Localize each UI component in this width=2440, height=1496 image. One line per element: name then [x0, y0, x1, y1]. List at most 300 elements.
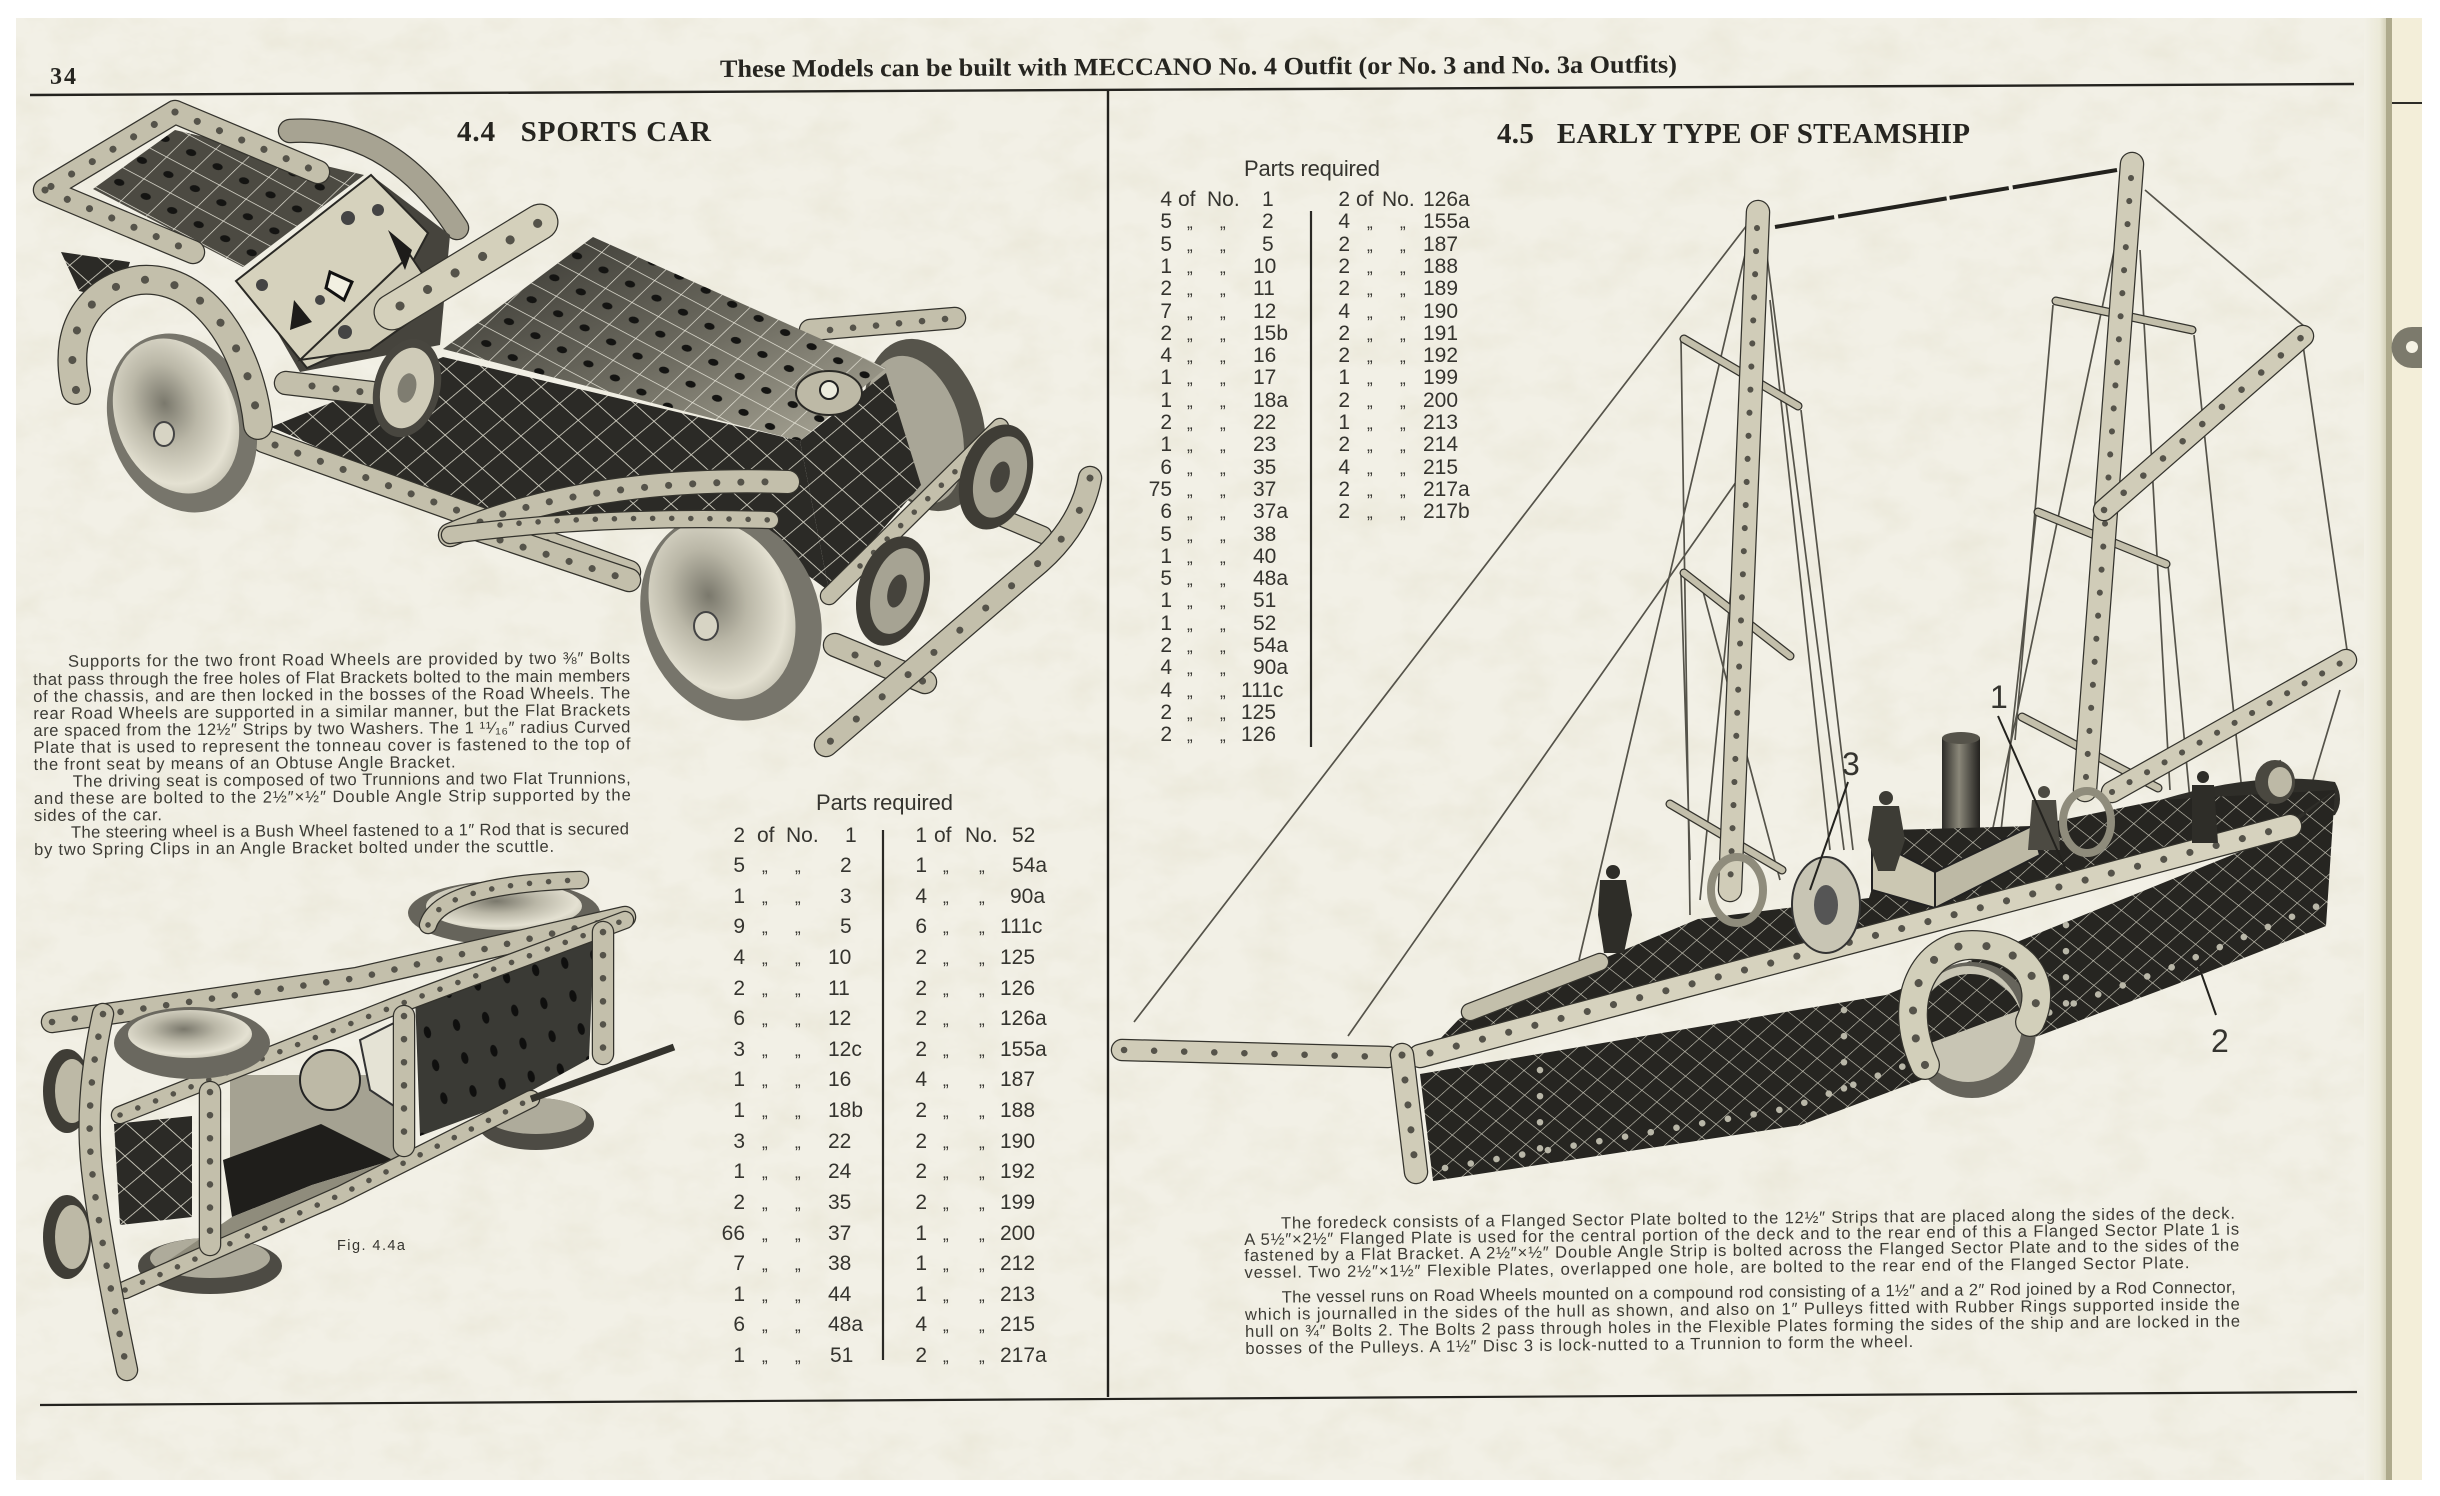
right column: 4	[1338, 300, 1350, 323]
left column: „	[795, 980, 801, 999]
right column: 2	[1338, 277, 1350, 300]
right column: „	[1400, 392, 1406, 411]
right column: „	[1367, 436, 1373, 455]
sports car description: and these are bolted to the 2½″×½″ Double Angle Strip supported by the	[34, 785, 631, 808]
left column: 4	[1160, 656, 1172, 679]
front mudguard	[72, 280, 258, 425]
right column: „	[979, 1133, 985, 1152]
left column: 10	[1253, 255, 1276, 278]
paddle box curved strip	[1913, 945, 2036, 1065]
right column: „	[1367, 280, 1373, 299]
left column: „	[795, 1102, 801, 1121]
right column: „	[1400, 503, 1406, 522]
right column: „	[943, 888, 949, 907]
right column: „	[979, 888, 985, 907]
left column: „	[1220, 503, 1226, 522]
left column: „	[1187, 481, 1193, 500]
right column: 2	[1338, 478, 1350, 501]
right column: „	[1400, 280, 1406, 299]
right column: 4	[915, 1313, 927, 1336]
left column: „	[1220, 615, 1226, 634]
left column: 9	[733, 915, 745, 938]
left column: „	[762, 1041, 768, 1060]
funnel	[1942, 732, 1980, 884]
deck strip	[1420, 826, 2290, 1056]
right column: „	[979, 1194, 985, 1213]
right column: „	[1367, 369, 1373, 388]
sailor aft of funnel	[2028, 786, 2060, 850]
sports car description: that pass through the free holes of Flat Brackets bolted to the main members	[33, 666, 630, 689]
left column: 90a	[1253, 656, 1288, 679]
right column: 190	[1000, 1130, 1035, 1153]
right column: 200	[1000, 1222, 1035, 1245]
left column: „	[795, 857, 801, 876]
side plate	[415, 937, 594, 1136]
left column: „	[795, 1286, 801, 1305]
right column: 2	[915, 946, 927, 969]
near wheel top	[114, 1007, 270, 1079]
left column: 111c	[1241, 679, 1283, 702]
left column: „	[795, 1255, 801, 1274]
floor plate rear	[125, 1160, 393, 1290]
right column: 4	[915, 885, 927, 908]
steamship description: vessel. Two 2½″×1½″ Flexible Plates, overlapped one hole, are bolted to the rear end of the Flanged Sector Plate.	[1244, 1253, 2190, 1282]
left column: 125	[1241, 701, 1276, 724]
right column: 217b	[1423, 500, 1470, 523]
deck	[1420, 790, 2335, 1060]
left column: „	[1220, 682, 1226, 701]
front bumper	[826, 478, 1090, 745]
left column: „	[1220, 481, 1226, 500]
callout number 1: 1	[1990, 679, 2008, 715]
chassis strip	[264, 441, 629, 572]
left column: 35	[1253, 456, 1276, 479]
title: sports car: 4.4 SPORTS CAR	[457, 116, 712, 148]
right column: „	[943, 1255, 949, 1274]
steamship description: which is journalled in the sides of the hull as shown, and also on 1″ Pulleys fitted with Rubber Rings supported inside the	[1244, 1295, 2240, 1324]
right column: 2	[1338, 322, 1350, 345]
top stay between masts	[1775, 170, 2117, 227]
left column: „	[795, 918, 801, 937]
right column: „	[979, 857, 985, 876]
stem strip	[1402, 1055, 1416, 1172]
left column: „	[1220, 414, 1226, 433]
left column: 2	[1160, 411, 1172, 434]
callout number 2: 2	[2211, 1023, 2229, 1059]
left column: „	[1187, 280, 1193, 299]
left column: „	[762, 1225, 768, 1244]
right column: „	[1400, 303, 1406, 322]
right column: 1	[1338, 411, 1350, 434]
left column: „	[1220, 659, 1226, 678]
left column: 54a	[1253, 634, 1288, 657]
left column: 2	[1160, 701, 1172, 724]
right column: „	[1367, 347, 1373, 366]
steering wheel disc	[796, 371, 862, 415]
left column: „	[795, 1225, 801, 1244]
right column: of	[934, 824, 952, 847]
right column: 215	[1000, 1313, 1035, 1336]
left column: 5	[1160, 233, 1172, 256]
left column: 6	[733, 1313, 745, 1336]
road wheel	[1908, 962, 2036, 1098]
right column: 2	[1338, 344, 1350, 367]
right column: „	[1400, 459, 1406, 478]
sports car description: are spaced from the 12½″ Strips by two Washers. The 1 ¹¹⁄₁₆″ radius Curved	[33, 717, 630, 740]
left column: „	[1187, 570, 1193, 589]
lower boom	[2112, 660, 2346, 792]
right column: 126a	[1423, 188, 1470, 211]
left column: 11	[1253, 277, 1275, 300]
left column: „	[1220, 213, 1226, 232]
left column: „	[795, 1010, 801, 1029]
left column: 18a	[1253, 389, 1288, 412]
right column: „	[943, 1225, 949, 1244]
left column: „	[1220, 236, 1226, 255]
left column: „	[795, 949, 801, 968]
main mast	[2085, 164, 2132, 790]
left column: „	[1220, 392, 1226, 411]
left column: „	[762, 1010, 768, 1029]
left column: „	[762, 1286, 768, 1305]
right column: 1	[915, 824, 927, 847]
left column: „	[1187, 414, 1193, 433]
right column: „	[1367, 213, 1373, 232]
callout leader 2	[2198, 964, 2216, 1015]
left column: „	[1220, 436, 1226, 455]
right column: „	[979, 949, 985, 968]
callout number 3: 3	[1842, 746, 1860, 782]
left column: 5	[1262, 233, 1274, 256]
left column: „	[1187, 659, 1193, 678]
left column: 6	[1160, 456, 1172, 479]
far bottom wheel	[478, 1098, 594, 1150]
hull side	[1420, 790, 2335, 1181]
left column: 2	[1160, 277, 1172, 300]
sailor at funnel	[1868, 791, 1905, 871]
left column: „	[795, 1163, 801, 1182]
illustration: steamship	[1122, 164, 2348, 1181]
right column: 212	[1000, 1252, 1035, 1275]
left pulleys	[43, 1049, 91, 1279]
left column: „	[1220, 548, 1226, 567]
right column: „	[979, 1163, 985, 1182]
radiator grille	[800, 373, 921, 591]
left column: 5	[840, 915, 852, 938]
right column: 189	[1423, 277, 1458, 300]
sports car description: The steering wheel is a Bush Wheel fastened to a 1″ Rod that is secured	[71, 819, 629, 842]
far side road wheel	[845, 324, 1005, 526]
callout leader 1	[1998, 716, 2066, 870]
column separator	[882, 830, 884, 1360]
left column: „	[762, 980, 768, 999]
left column: 1	[733, 1068, 745, 1091]
steamship description: The foredeck consists of a Flanged Sector Plate bolted to the 12½″ Strips that are placed along the sides of the deck.	[1281, 1204, 2235, 1233]
right column: 52	[1012, 824, 1035, 847]
right column: of	[1356, 188, 1374, 211]
right column: „	[979, 918, 985, 937]
left column: 22	[1253, 411, 1276, 434]
left column: „	[762, 1347, 768, 1366]
second long strip	[120, 920, 625, 1115]
right column: 191	[1423, 322, 1458, 345]
right column: 2	[915, 1130, 927, 1153]
yard arms, main mast	[2022, 301, 2192, 788]
rear mudguard	[290, 131, 457, 228]
right column: 6	[915, 915, 927, 938]
left column	[722, 824, 863, 1367]
right column: „	[1367, 414, 1373, 433]
right column: „	[943, 1041, 949, 1060]
right column: „	[1367, 236, 1373, 255]
right column: 188	[1000, 1099, 1035, 1122]
left column: 4	[1160, 188, 1172, 211]
right column: „	[1400, 258, 1406, 277]
steering pulley	[363, 332, 451, 444]
left column: 1	[733, 885, 745, 908]
left column: 35	[828, 1191, 851, 1214]
rear road wheel	[81, 311, 283, 535]
right column: „	[979, 1255, 985, 1274]
right column: 2	[1338, 500, 1350, 523]
right column: „	[979, 1010, 985, 1029]
left column: „	[1187, 503, 1193, 522]
left column: 2	[733, 1191, 745, 1214]
illustration: underside of car, Fig. 4.4a	[43, 880, 674, 1370]
left column: 1	[733, 1160, 745, 1183]
right column: „	[943, 1102, 949, 1121]
left column: „	[795, 1347, 801, 1366]
bottom chassis strip and rod	[125, 1047, 674, 1290]
right column: 155a	[1423, 210, 1470, 233]
left column: 1	[1160, 255, 1172, 278]
top long strip	[52, 917, 625, 1022]
right column: 2	[915, 1191, 927, 1214]
near bottom wheel	[138, 1238, 282, 1294]
left column: 1	[1160, 389, 1172, 412]
right column: „	[1400, 213, 1406, 232]
right column: 213	[1423, 411, 1458, 434]
left column: „	[1187, 236, 1193, 255]
right column: 155a	[1000, 1038, 1047, 1061]
left column: „	[1220, 526, 1226, 545]
right column: „	[943, 980, 949, 999]
sports car description: The driving seat is composed of two Trunnions and two Flat Trunnions,	[73, 768, 631, 791]
right column: „	[979, 1102, 985, 1121]
right column: 2	[1338, 233, 1350, 256]
driving seat plates	[236, 175, 440, 368]
page number: 34	[50, 64, 76, 90]
ring aft	[2063, 791, 2111, 853]
right column: 4	[915, 1068, 927, 1091]
front pulleys	[844, 415, 1046, 654]
left column: „	[762, 857, 768, 876]
left column: 6	[733, 1007, 745, 1030]
right column: No.	[965, 824, 998, 847]
right column: 1	[1338, 366, 1350, 389]
right column: „	[943, 918, 949, 937]
right column: 217a	[1423, 478, 1470, 501]
left column: 23	[1253, 433, 1276, 456]
header rule	[30, 84, 2354, 95]
right column: „	[1367, 503, 1373, 522]
left column: „	[1187, 637, 1193, 656]
right column: No.	[1382, 188, 1415, 211]
sailor at stern	[2192, 771, 2218, 843]
steamship description: A 5½″×2½″ Flanged Plate is used for the central portion of the deck and to the rear end of this a Flanged Sector Plate 1 is	[1244, 1220, 2239, 1249]
right column: „	[979, 1225, 985, 1244]
steamship description: hull on ¾″ Bolts 2. The Bolts 2 pass through holes in the Flexible Plates forming the sides of the ship and are locked in the	[1245, 1312, 2240, 1341]
right column: „	[943, 1133, 949, 1152]
left column: „	[1220, 726, 1226, 745]
left column: 12	[1253, 300, 1276, 323]
left column: 48a	[828, 1313, 863, 1336]
lower curved strip	[450, 518, 770, 535]
left column: 4	[1160, 344, 1172, 367]
hull rivets	[1445, 905, 2320, 1168]
left column: 37	[828, 1222, 851, 1245]
yard arms, fore mast	[1670, 339, 1798, 870]
left column: 75	[1149, 478, 1172, 501]
far wheel top	[408, 881, 600, 945]
left column: 5	[1160, 210, 1172, 233]
left column: „	[1220, 369, 1226, 388]
left column: 1	[1160, 545, 1172, 568]
left column: „	[1220, 592, 1226, 611]
right column: 215	[1423, 456, 1458, 479]
left column: 1	[1160, 589, 1172, 612]
right column: „	[943, 1010, 949, 1029]
left column: „	[762, 918, 768, 937]
left column: „	[762, 1071, 768, 1090]
right column: „	[979, 1286, 985, 1305]
right column: 2	[1338, 188, 1350, 211]
left column: 3	[840, 885, 852, 908]
left column: „	[762, 949, 768, 968]
left column: 10	[828, 946, 851, 969]
right column: „	[943, 1286, 949, 1305]
left column: „	[1187, 704, 1193, 723]
left column: „	[1187, 325, 1193, 344]
left column: „	[1220, 303, 1226, 322]
left column: „	[1187, 592, 1193, 611]
parts list heading: Parts required	[1244, 156, 1380, 181]
right column: 200	[1423, 389, 1458, 412]
parts list: sports car	[722, 790, 1047, 1367]
left column: 1	[733, 1099, 745, 1122]
right column	[915, 824, 1047, 1367]
right column: „	[1367, 392, 1373, 411]
right column: 2	[915, 977, 927, 1000]
sports car description: Supports for the two front Road Wheels are provided by two ⅜″ Bolts	[68, 648, 630, 671]
mid gears	[230, 1020, 400, 1165]
left column: „	[762, 1102, 768, 1121]
left column: 37a	[1253, 500, 1288, 523]
left column: 12c	[828, 1038, 862, 1061]
left column: „	[795, 1041, 801, 1060]
left column: 1	[845, 824, 857, 847]
tonneau plate	[93, 130, 364, 267]
left column: „	[762, 1163, 768, 1182]
left column: of	[757, 824, 775, 847]
left column: 1	[733, 1283, 745, 1306]
left column: „	[1187, 392, 1193, 411]
right column: 126	[1000, 977, 1035, 1000]
left column: 18b	[828, 1099, 863, 1122]
left column: 5	[1160, 567, 1172, 590]
left column: „	[1187, 213, 1193, 232]
left column: 2	[1160, 723, 1172, 746]
stern rim	[2160, 779, 2340, 835]
sports car description: the front seat by means of an Obtuse Angle Bracket.	[34, 752, 456, 774]
right column: 2	[1338, 433, 1350, 456]
left column: „	[1187, 726, 1193, 745]
left column: „	[1187, 682, 1193, 701]
right column: 2	[915, 1099, 927, 1122]
left column: „	[762, 1316, 768, 1335]
left column: 52	[1253, 612, 1276, 635]
right column: 217a	[1000, 1344, 1047, 1367]
column divider	[1107, 90, 1109, 1397]
left column: „	[1220, 280, 1226, 299]
left column: „	[795, 888, 801, 907]
left column: 4	[1160, 679, 1172, 702]
right column: „	[1400, 436, 1406, 455]
steamship description	[1243, 1204, 2240, 1358]
disc 3 on trunnion	[1792, 857, 1860, 953]
left column: „	[1220, 704, 1226, 723]
ring fore	[1711, 857, 1763, 923]
right column: „	[943, 1347, 949, 1366]
lower rear panel	[61, 252, 130, 300]
left column: 17	[1253, 366, 1276, 389]
curved strips over the wheel	[450, 481, 788, 535]
right column: 1	[915, 1222, 927, 1245]
left column: „	[795, 1316, 801, 1335]
left column: 37	[1253, 478, 1276, 501]
front road wheel	[610, 486, 852, 748]
left column: 2	[840, 854, 852, 877]
right column: 126a	[1000, 1007, 1047, 1030]
right column: 2	[915, 1007, 927, 1030]
left column: No.	[786, 824, 819, 847]
left column: „	[1220, 637, 1226, 656]
rear frame strips	[45, 112, 318, 252]
right column: „	[943, 1071, 949, 1090]
right column: 2	[1338, 255, 1350, 278]
left column: 12	[828, 1007, 851, 1030]
left column: 1	[1160, 366, 1172, 389]
right column: „	[979, 1316, 985, 1335]
right column: 199	[1423, 366, 1458, 389]
right column: 1	[915, 1283, 927, 1306]
left column: „	[795, 1133, 801, 1152]
left column: „	[1187, 459, 1193, 478]
left column: 3	[733, 1130, 745, 1153]
left column: 22	[828, 1130, 851, 1153]
scuttle double strip	[392, 222, 540, 312]
top strip of scuttle	[810, 318, 955, 330]
right column: 192	[1000, 1160, 1035, 1183]
right column: „	[943, 1194, 949, 1213]
right column: 199	[1000, 1191, 1035, 1214]
left column: 2	[1262, 210, 1274, 233]
left column: 3	[733, 1038, 745, 1061]
right column: 2	[915, 1344, 927, 1367]
left column: 7	[1160, 300, 1172, 323]
right column: „	[1367, 481, 1373, 500]
vertical cross strips	[210, 932, 603, 1245]
